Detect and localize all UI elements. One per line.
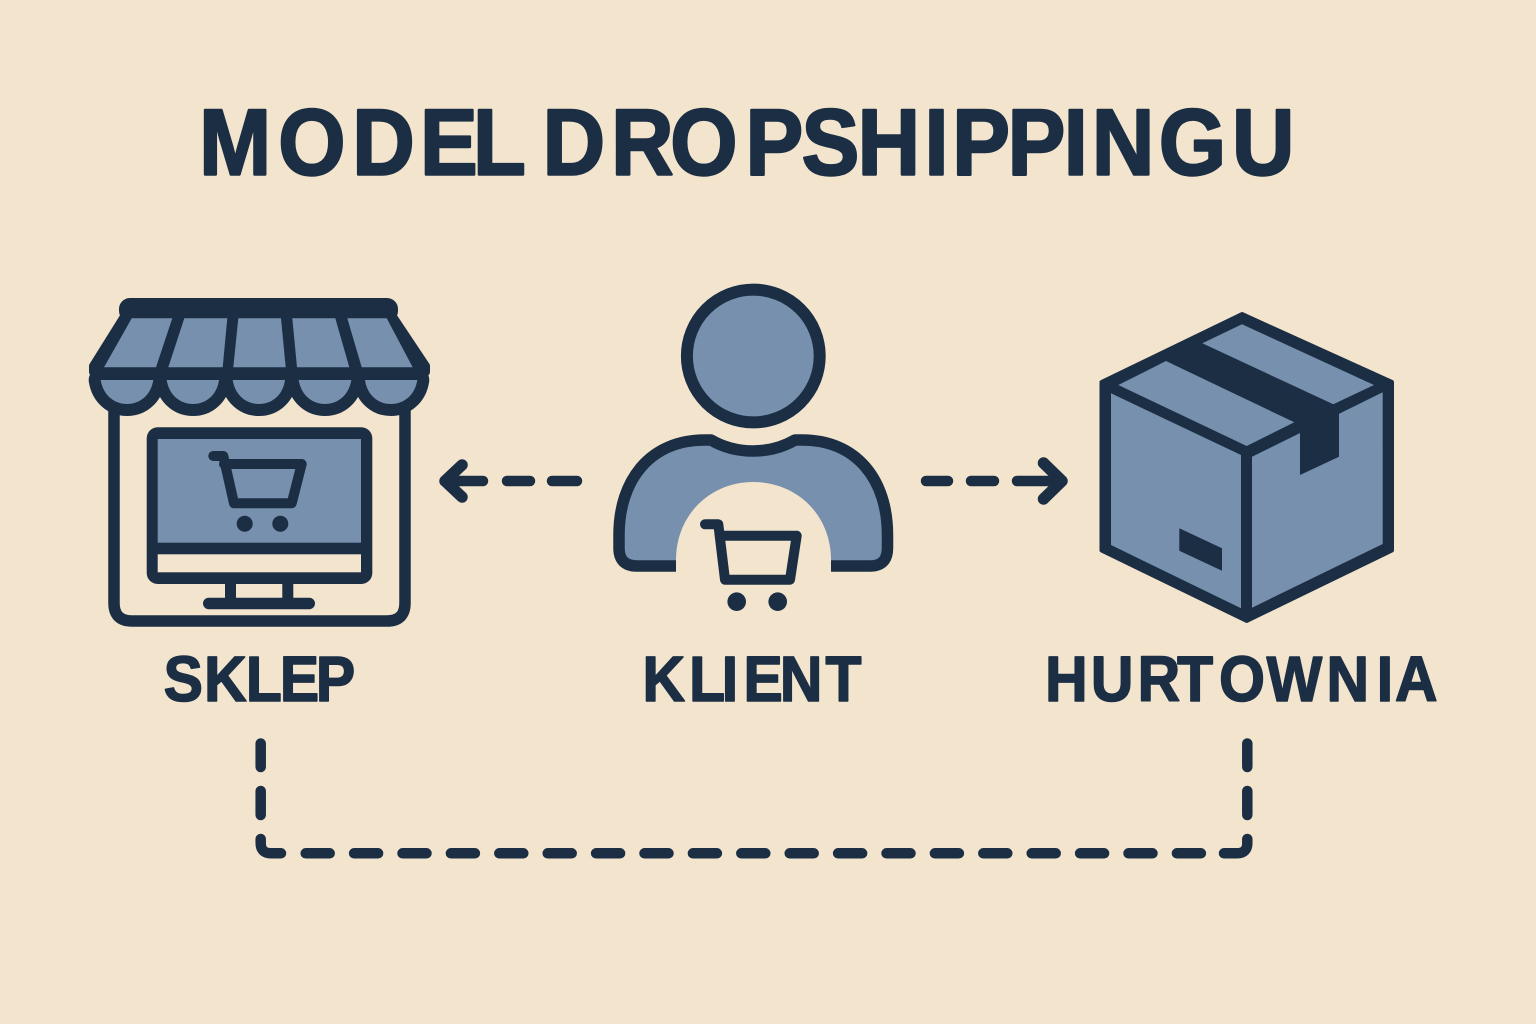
cart [705,524,797,611]
top flap right [1202,324,1374,404]
label: customer: KLIENT [643,644,861,716]
connector: shop to wholesaler [261,744,1247,853]
computer monitor [147,427,372,609]
icon: package [1102,314,1392,621]
icon: cart on monitor [213,456,302,532]
label: wholesaler: HURTOWNIA [1045,644,1438,716]
arrow: customer to wholesaler [926,463,1062,499]
shop building [114,396,405,621]
box right face [1252,392,1383,608]
icon: shop [93,298,426,621]
label: shop: SKLEP [164,644,355,716]
arch cut-out [676,482,831,574]
label [1179,528,1222,571]
arrow: customer to shop [445,465,577,497]
head [687,290,820,422]
shoulders [619,440,888,566]
title: MODEL DROPSHIPPINGU [199,90,1294,195]
box body [1102,314,1392,621]
box left face [1111,393,1241,608]
tape [1300,411,1339,475]
top flap left [1118,361,1294,446]
icon: customer [619,290,888,611]
awning [93,298,426,404]
